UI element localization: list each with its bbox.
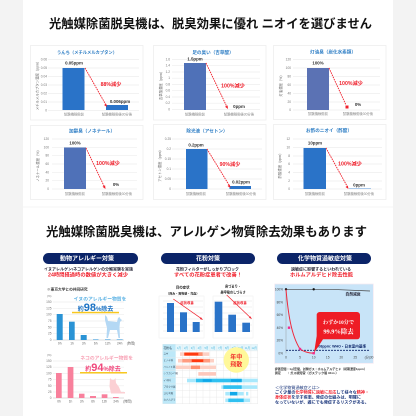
panel: methyl mercaptan chart: 0 <box>45 108 47 112</box>
pill heading: pet allergy: 動物アレルギー対策 <box>60 255 114 263</box>
panel: methyl mercaptan chart: 0.03 <box>41 83 47 87</box>
chemical subtitle: 過敏症に影響するといわれている <box>291 266 351 272</box>
panel: nonenal chart: 加齢臭（ノネナール） <box>69 128 115 134</box>
panel: acetone chart <box>154 124 266 200</box>
pill heading: chemical sensitivity: 化学物質過敏症対策 <box>298 255 352 263</box>
pollen calendar table: イネ科 <box>164 378 171 382</box>
panel: acetone chart: 0.2ppm <box>188 142 204 148</box>
panel: kerosene chart: 試験機稼働後30分後 <box>343 111 374 116</box>
test conditions note: 評価空間：1㎥空間、試験ガス：ホルムアルデヒド（初期濃度1ppm） <box>275 366 367 371</box>
panel: nonenal chart: 60 <box>45 162 49 166</box>
panel: acetic acid chart: お酢のニオイ（酢酸） <box>306 127 352 134</box>
panel: nonenal chart: 80 <box>45 154 49 158</box>
title: allergen removal: 光触媒除菌脱臭機は、アレルゲン物質除去効果もあります <box>46 224 367 239</box>
pet allergy subtitle: 24時間経過時の数値が大きく減少 <box>48 272 128 278</box>
panel: acetic acid chart: 4 <box>288 170 290 174</box>
panel: acetic acid chart: 10 <box>286 146 290 150</box>
bar chart: cat allergen: 75 <box>48 378 52 382</box>
callout: year-round pollen: 飛散 <box>230 360 242 368</box>
title: deodorizing effect: 光触媒除菌脱臭機は、脱臭効果に優れ ニオイを選びません <box>49 16 372 31</box>
panel: nonenal chart: 試験機稼働後30分後 <box>102 191 133 196</box>
panel: methyl mercaptan chart: メチルメルカプタン濃度（ppm） <box>34 60 40 110</box>
bar chart: eye symptoms: 目の症状 <box>176 284 190 290</box>
panel: acetic acid chart: 試験機稼働後30分後 <box>344 191 375 196</box>
pollen calendar table: 6月 <box>211 346 216 350</box>
pollen calendar table: 11月 <box>245 346 251 350</box>
panel: chemical sensitivity <box>275 253 374 405</box>
callout: cat 94%: ネコのアレルギー物質を <box>80 354 133 362</box>
panel: isovaleric acid chart: 1.4 <box>166 64 170 68</box>
icon: dog silhouette <box>105 315 122 338</box>
panel: acetone chart: 試験機稼働後30分後 <box>226 191 257 196</box>
panel: kerosene chart: 0% <box>355 102 361 107</box>
panel: kerosene chart: 試験機稼働前 <box>308 111 329 116</box>
pollen calendar table: カナムグラ <box>164 398 176 402</box>
bar chart: eye symptoms: 症状改善 <box>180 300 194 305</box>
pill heading: chemical sensitivity <box>277 253 371 264</box>
panel: acetic acid chart: 試験機稼働前 <box>305 191 326 196</box>
callout: 99.9% in 10 minutes: わずか10分で <box>323 318 354 326</box>
bar chart: dog allergen: 150 <box>46 300 52 304</box>
bar chart: dog allergen: 75 <box>48 319 52 323</box>
pollen calendar table: 4月 <box>198 346 202 350</box>
bar chart: cat allergen: 25 <box>48 390 52 394</box>
bar chart: dog allergen: (時間) <box>127 340 135 346</box>
panel: kerosene chart: 100%減少 <box>339 79 364 87</box>
panel: acetone chart: 0.05 <box>165 177 171 181</box>
panel: methyl mercaptan chart: 試験機稼働後30分後 <box>102 112 133 116</box>
panel: acetone chart: 0 <box>169 187 171 191</box>
panel: isovaleric acid chart: 足の臭い（吉草酸） <box>192 49 234 56</box>
line chart: formaldehyde decay: 15 <box>326 356 330 360</box>
bar chart: dog allergen: 50 <box>48 325 52 329</box>
pill heading: pollen: 花粉対策 <box>196 255 220 263</box>
panel: kerosene chart: 60 <box>287 83 291 87</box>
panel: methyl mercaptan chart <box>30 46 143 120</box>
panel: nonenal chart <box>30 126 143 200</box>
pollen calendar table: 12月 <box>252 346 257 350</box>
panel: isovaleric acid chart: 吉草酸濃度（ppm） <box>158 70 163 100</box>
panel: kerosene chart: 80 <box>287 74 291 78</box>
panel: isovaleric acid chart: 0.6 <box>166 89 170 93</box>
panel: methyl mercaptan chart: 0.04 <box>41 74 47 78</box>
line chart: formaldehyde decay: 40% <box>277 326 283 330</box>
panel: nonenal chart: 40 <box>45 170 49 174</box>
bar chart: dog allergen: (%) <box>47 294 52 298</box>
callout: 99.9% in 10 minutes: 99.9%除去 <box>323 326 354 336</box>
bar chart: eye symptoms <box>159 284 204 338</box>
panel: methyl mercaptan chart: うんち（メチルメルカプタン） <box>57 49 117 56</box>
pollen calendar table: ハンノキ属 <box>164 364 176 368</box>
line chart: formaldehyde decay: 80% <box>277 300 283 304</box>
bar chart: nasal symptoms <box>213 284 253 338</box>
panel: acetone chart: 0.2 <box>167 147 171 151</box>
panel: kerosene chart: 100 <box>286 66 291 70</box>
panel: kerosene chart: 100% <box>312 60 324 66</box>
bar chart: cat allergen: 0h <box>57 400 61 404</box>
panel: kerosene chart: 0 <box>289 108 291 112</box>
panel: methyl mercaptan chart: 0.05 <box>41 66 47 70</box>
panel: pet allergy <box>43 253 138 404</box>
chemical subtitle: ホルムアルデヒド除去性能 <box>290 270 354 278</box>
panel: acetone chart: 0.1 <box>167 167 171 171</box>
bar chart: nasal symptoms: 鼻呼吸のしづらさ <box>220 290 246 294</box>
line chart: formaldehyde decay: 10 <box>312 356 316 360</box>
pollen subtitle: すべての花粉症患者で改善！ <box>174 270 242 278</box>
line chart: formaldehyde decay <box>275 284 374 363</box>
panel: nonenal chart: ノネナール濃度（%） <box>35 148 40 182</box>
pet allergy subtitle: イヌアレルゲン/ネコアレルゲンの分解実験を実施 <box>44 266 133 272</box>
pill heading: pet allergy <box>43 253 138 264</box>
pollen calendar table: 10月 <box>238 346 244 350</box>
panel: kerosene chart <box>274 46 386 120</box>
panel: isovaleric acid chart: 1.2 <box>166 70 170 74</box>
panel: acetone chart: 試験機稼働前 <box>186 191 207 196</box>
line chart: formaldehyde decay: 100% <box>275 288 283 292</box>
bar chart: dog allergen: 24h <box>117 342 123 346</box>
bar chart: cat allergen: 150 <box>46 359 52 363</box>
pollen calendar table: 2月 <box>184 346 188 350</box>
panel: methyl mercaptan chart: 0.05ppm <box>65 60 83 66</box>
bar chart: dog allergen: 12h <box>105 342 111 346</box>
bar chart: nasal symptoms: 鼻づまり・ <box>225 284 241 288</box>
bar chart: cat allergen: 6h <box>91 400 95 404</box>
line chart: formaldehyde decay: 60% <box>277 313 283 317</box>
panel: nonenal chart: 0% <box>113 182 119 187</box>
panel: nonenal chart: 100 <box>44 145 49 149</box>
bar chart: dog allergen <box>46 294 135 346</box>
panel: nonenal chart: 100%減少 <box>96 159 121 167</box>
panel: acetic acid chart: 10ppm <box>308 140 322 146</box>
panel: acetone chart: 90%減少 <box>220 160 241 168</box>
panel: pollen <box>159 253 258 404</box>
line chart: formaldehyde decay: 20 <box>340 356 343 360</box>
panel: kerosene chart: 灯油濃度（%） <box>278 73 283 97</box>
bar chart: cat allergen: 12h <box>102 400 107 404</box>
panel: nonenal chart: 0 <box>47 187 49 191</box>
panel: nonenal chart: 20 <box>45 179 49 183</box>
icon: cat silhouette <box>110 378 125 394</box>
callout: cat 94% <box>80 354 133 374</box>
panel: acetone chart: 0.25 <box>165 137 171 141</box>
panel: isovaleric acid chart: 0.2 <box>166 101 170 105</box>
bar chart: eye symptoms: （痒み・異物感・充血） <box>166 290 199 295</box>
pollen subtitle <box>174 266 242 278</box>
test conditions note <box>275 366 367 375</box>
explanation text <box>275 384 369 405</box>
panel: kerosene chart: 灯油臭（炭化水素類） <box>310 48 356 56</box>
pollen calendar table: シラカンバ属 <box>164 371 178 375</box>
panel: isovaleric acid chart: 試験機稼働前 <box>185 112 206 116</box>
panel: acetone chart: 除光液（アセトン） <box>186 128 228 134</box>
bar chart: nasal symptoms: 症状改善 <box>233 300 247 305</box>
pill heading: pollen <box>161 253 255 264</box>
panel: acetone chart: 0.02ppm <box>232 180 250 184</box>
bar chart: cat allergen: (時間) <box>123 398 132 404</box>
panel: isovaleric acid chart: 100%減少 <box>221 82 246 90</box>
explanation text: ごく少量の化学物質に過敏に反応して様々な精神・ <box>275 389 369 395</box>
panel: isovaleric acid chart: 1.5ppm <box>187 56 203 62</box>
bar chart: dog allergen: 25 <box>48 332 52 336</box>
pollen calendar table: 花粉名 <box>164 346 172 350</box>
line chart: formaldehyde decay: 5 <box>299 356 301 360</box>
explanation text: 身体症状を示す疾患。発症の仕組みは、明確に <box>275 394 361 400</box>
bar chart: cat allergen: 100 <box>46 371 52 375</box>
panel: methyl mercaptan chart: 88%減少 <box>101 80 122 88</box>
panel: nonenal chart: 120 <box>44 137 49 141</box>
chemical subtitle <box>290 266 354 278</box>
bar chart: cat allergen: (%) <box>47 353 52 357</box>
pet allergy subtitle <box>44 266 133 278</box>
callout: dog 98%: イヌのアレルギー物質を <box>74 296 127 302</box>
pollen calendar table: 9月 <box>232 346 236 350</box>
bar chart: cat allergen: 3h <box>80 400 84 404</box>
panel: acetic acid chart: 8 <box>288 154 290 158</box>
callout: dog 98% <box>72 296 127 314</box>
line chart: formaldehyde decay: 0% <box>278 352 283 356</box>
panel: acetic acid chart: 0ppm <box>353 182 365 188</box>
panel: kerosene chart: 40 <box>287 92 291 96</box>
test conditions note: 測定 ：ガス検知管（ガステック製 91LL） <box>275 370 338 375</box>
panel: isovaleric acid chart: 1 <box>168 76 170 80</box>
pollen subtitle: 花粉フィルターがしっかりブロック <box>176 266 239 272</box>
pollen calendar table: 5月 <box>204 346 209 350</box>
panel: acetone chart: 0.15 <box>165 157 171 161</box>
panel: isovaleric acid chart: 試験機稼働後30分後 <box>224 112 255 116</box>
panel: acetic acid chart: 12 <box>286 137 290 141</box>
pollen calendar table <box>163 344 258 404</box>
panel: methyl mercaptan chart: 0.02 <box>41 92 47 96</box>
bar chart: dog allergen: 6h <box>94 342 98 346</box>
panel: isovaleric acid chart: 0.8 <box>166 82 170 86</box>
bar chart: dog allergen: 0 <box>50 338 52 342</box>
panel: methyl mercaptan chart: 0.01 <box>41 100 47 104</box>
line chart: formaldehyde decay: 25 <box>354 356 357 360</box>
bar chart: dog allergen: 100 <box>46 313 52 317</box>
pollen calendar table: ヨモギ属 <box>164 391 174 395</box>
bar chart: cat allergen: 50 <box>48 384 52 388</box>
panel: kerosene chart: 20 <box>287 100 291 104</box>
panel: acetic acid chart: 100%減少 <box>338 160 363 168</box>
panel: acetone chart: アセトン濃度（ppm） <box>157 148 162 182</box>
panel: acetic acid chart: 酢酸濃度（ppm） <box>277 152 282 178</box>
pollen calendar table: ブタクサ属 <box>164 384 176 388</box>
panel: methyl mercaptan chart: 0.06 <box>41 58 47 62</box>
bar chart: cat allergen: 125 <box>46 365 52 369</box>
callout: 99.9% in 10 minutes <box>314 312 360 353</box>
bar chart: dog allergen: 125 <box>46 306 52 310</box>
panel: acetic acid chart <box>274 124 386 200</box>
panel: isovaleric acid chart: 0.4 <box>166 95 170 99</box>
line chart: formaldehyde decay: (分)30 <box>365 354 374 360</box>
panel: acetic acid chart: 6 <box>288 162 290 166</box>
panel: nonenal chart: 試験機稼働前 <box>65 191 86 196</box>
bar chart: dog allergen: 1h <box>70 342 74 346</box>
bar chart: dog allergen: 3h <box>82 342 86 346</box>
panel: nonenal chart: 100% <box>69 140 81 146</box>
line chart: formaldehyde decay: 自然減衰 <box>345 292 361 296</box>
explanation text: ＜化学物質過敏症とは＞ <box>275 384 320 390</box>
panel: kerosene chart: 120 <box>286 58 291 62</box>
bar chart: cat allergen: 1h <box>69 400 72 404</box>
pollen calendar table: ヒノキ科 <box>164 358 174 362</box>
panel: isovaleric acid chart: 1.6 <box>166 58 170 62</box>
explanation text: なっていないが、誰にでも発症するリスクがある。 <box>275 399 369 405</box>
panel: isovaleric acid chart <box>154 46 266 120</box>
pollen calendar table: 7月 <box>218 346 223 350</box>
callout: cat 94%: 約94%除去 <box>85 362 121 374</box>
panel: methyl mercaptan chart: 0.006ppm <box>110 99 130 104</box>
pollen calendar table: スギ <box>164 352 169 356</box>
pollen calendar table: 8月 <box>225 346 229 350</box>
callout: year-round pollen <box>224 347 249 373</box>
panel: acetic acid chart: 0 <box>288 187 290 191</box>
panel: isovaleric acid chart: 0ppm <box>233 104 245 109</box>
bar chart: cat allergen: 0 <box>50 396 52 400</box>
pollen calendar table: 1月 <box>177 346 181 350</box>
line chart: formaldehyde decay: 0 <box>285 356 287 360</box>
callout: year-round pollen: 年中 <box>230 353 242 361</box>
line chart: formaldehyde decay: 0.08ppm: WHO・日本室内基準 <box>315 344 366 348</box>
panel: methyl mercaptan chart: 試験機稼働前 <box>64 112 85 116</box>
panel: acetic acid chart: 2 <box>288 179 290 183</box>
bar chart: cat allergen: 24h <box>113 400 119 404</box>
callout: dog 98%: 約98%除去 <box>78 302 113 314</box>
bar chart: cat allergen <box>46 353 132 404</box>
line chart: formaldehyde decay: 20% <box>277 339 283 343</box>
pollen calendar table: 3月 <box>191 346 195 350</box>
bar chart: dog allergen: 0h <box>58 342 62 346</box>
panel: isovaleric acid chart: 0 <box>168 108 170 112</box>
source note: ※東京大学との共同研究 <box>47 286 88 292</box>
